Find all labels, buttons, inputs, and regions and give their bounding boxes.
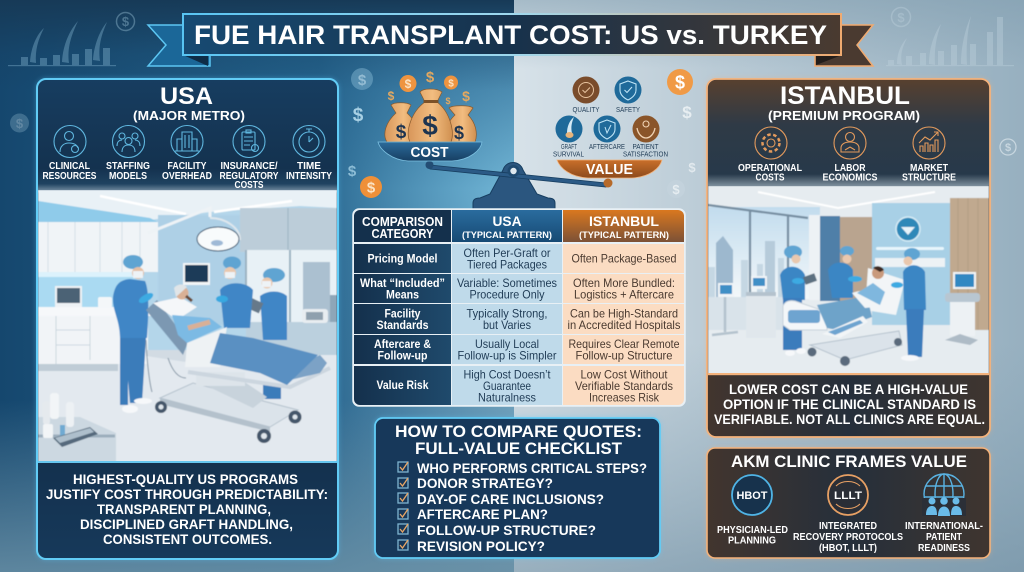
callout band: US programs: CONSISTENT OUTCOMES.: [103, 532, 272, 547]
subheading: major metro: (MAJOR METRO): [133, 108, 245, 123]
image: US clinic treatment room: [38, 190, 337, 462]
decoration: dollar coins left: $: [16, 116, 24, 131]
label: operational costs: COSTS: [756, 172, 785, 184]
labels: value factors: GRAFT: [561, 144, 577, 151]
label: market structure: [902, 163, 956, 184]
checklist items: [417, 460, 647, 554]
labels: value factors: SURVIVAL: [553, 152, 584, 158]
label: time intensity: INTENSITY: [286, 171, 332, 182]
label: clinical resources: CLINICAL: [49, 161, 90, 172]
label: staffing models: STAFFING: [106, 161, 150, 172]
icon: clinical resources: [54, 126, 86, 158]
table header: (TYPICAL PATTERN): [462, 230, 552, 241]
title banner: [148, 14, 873, 66]
labels: value factors: QUALITY: [572, 107, 600, 114]
callout band: lower cost: [708, 373, 989, 436]
table row: value risk: Low Cost Without: [580, 368, 668, 382]
label: operational costs: [738, 163, 802, 184]
label: time intensity: [286, 161, 332, 182]
label: international-patient readiness: READINESS: [918, 543, 970, 554]
table header: (TYPICAL PATTERN): [579, 230, 669, 241]
table header: COMPARISON: [362, 214, 443, 229]
label: physician-led planning: PLANNING: [728, 536, 776, 546]
icon: staffing models: [112, 126, 144, 158]
icon: coins above bags: $: [367, 180, 376, 196]
tray with bottles: [38, 417, 116, 462]
table row: value risk: Naturalness: [478, 392, 536, 404]
table row: aftercare and follow-up: [354, 335, 684, 364]
icon: facility overhead: [171, 126, 203, 158]
icon: coins above bags: [360, 69, 693, 198]
icon: scale fulcrum and beam: [426, 161, 612, 210]
checklist items: DAY-OF CARE INCLUSIONS?: [417, 491, 604, 507]
right machine: [950, 302, 976, 331]
icon: coins above bags: $: [462, 88, 470, 104]
label: market structure: STRUCTURE: [902, 172, 956, 184]
table row: value risk: Verifiable Standards: [575, 380, 673, 393]
table row: facility standards: [354, 304, 684, 334]
icon: coins above bags: $: [426, 69, 435, 86]
callout band: lower cost: VERIFIABLE. NOT ALL CLINICS ARE EQUAL.: [714, 412, 985, 427]
label: labor economics: ECONOMICS: [822, 172, 878, 184]
value pan: VALUE: [586, 162, 633, 178]
label: insurance and regulatory costs: [220, 161, 279, 191]
icon: coins above bags: $: [388, 89, 395, 103]
table row: facility standards: in Accredited Hospitals: [568, 319, 681, 332]
decoration: floating dollar signs: $: [672, 182, 680, 197]
icon: money bags: $: [454, 123, 464, 143]
table header: CATEGORY: [372, 226, 434, 241]
person far right: [260, 292, 287, 340]
decoration: floating dollar signs: [348, 68, 1016, 198]
table row: pricing model: [354, 244, 684, 273]
label: integrated recovery protocols: (HBOT, LLLT): [819, 543, 877, 554]
label: market structure: MARKET: [910, 163, 948, 174]
cost pan: [378, 142, 482, 161]
decoration: floating dollar signs: $: [1005, 142, 1011, 154]
table row: aftercare and follow-up: Follow-up is Simpler: [458, 350, 557, 362]
heading: checklist: FULL-VALUE CHECKLIST: [415, 439, 623, 458]
table row: what included means: Procedure Only: [470, 288, 545, 302]
icon: patient satisfaction: [632, 116, 660, 142]
table row: value risk: [354, 366, 684, 405]
callout band: US programs: HIGHEST-QUALITY US PROGRAMS: [73, 472, 298, 487]
table row: aftercare and follow-up: Requires Clear Remote: [568, 338, 680, 351]
panel: full-value checklist: [375, 418, 660, 558]
icon: HBOT: [732, 475, 772, 515]
table header: ISTANBUL: [589, 213, 659, 229]
labels: value factors: PATIENT: [632, 144, 659, 151]
table header: USA: [492, 213, 522, 229]
label: integrated recovery protocols: INTEGRATED: [819, 521, 877, 532]
table row: aftercare and follow-up: Aftercare &: [374, 338, 432, 351]
panel: USA: [37, 79, 338, 559]
checklist items: FOLLOW-UP STRUCTURE?: [417, 522, 596, 538]
labels: value factors: SAFETY: [616, 107, 640, 114]
icon: LLLT: [828, 475, 868, 515]
decoration: floating dollar signs: $: [688, 160, 696, 175]
label: facility overhead: FACILITY: [168, 161, 207, 172]
table row: facility standards: Standards: [376, 319, 428, 332]
icon: labor economics: [834, 127, 866, 159]
label: physician-led planning: [717, 525, 788, 546]
cost pan: COST: [410, 145, 449, 161]
icon: market structure chart: [913, 127, 945, 159]
label: facility overhead: [162, 161, 212, 182]
label: staffing models: [106, 161, 150, 182]
label: integrated recovery protocols: [793, 521, 903, 554]
value pan: [557, 160, 662, 178]
decoration: hair and bars top left: [8, 21, 116, 66]
icon: money bags: $: [422, 110, 438, 141]
callout band: US programs: JUSTIFY COST THROUGH PREDICTABILITY:: [46, 487, 328, 502]
icon: coins above bags: $: [675, 72, 685, 92]
table row: facility standards: Facility: [384, 308, 421, 320]
callout band: US programs: [38, 461, 337, 558]
labels: value factors: AFTERCARE: [589, 144, 625, 151]
decoration: hair and bars top right: [886, 8, 1014, 66]
callout band: US programs: DISCIPLINED GRAFT HANDLING,: [80, 517, 293, 532]
table row: what included means: Often More Bundled:: [573, 277, 675, 290]
image: Istanbul hospital room: [708, 186, 989, 376]
callout band: lower cost: OPTION IF THE CLINICAL STANDARD IS: [723, 397, 976, 412]
table row: pricing model: Tiered Packages: [467, 258, 547, 272]
table row: pricing model: Pricing Model: [368, 252, 438, 266]
decoration: dollar coins left: [10, 12, 134, 132]
callout band: lower cost: LOWER COST CAN BE A HIGH-VALUE: [729, 382, 968, 397]
labels: value factors: SATISFACTION: [623, 152, 668, 158]
icon: money bags: [385, 89, 476, 143]
table row: facility standards: Typically Strong,: [466, 308, 548, 320]
person left: [113, 279, 148, 338]
label: operational costs: OPERATIONAL: [738, 163, 802, 174]
table row: value risk: High Cost Doesn’t: [464, 368, 551, 382]
heading: USA: USA: [160, 83, 213, 110]
table row: what included means: Means: [386, 288, 419, 302]
icon: quality: [572, 76, 600, 104]
label: clinical resources: [42, 161, 97, 182]
person A: [780, 267, 805, 300]
labels: value factors: [553, 107, 668, 158]
table row: aftercare and follow-up: Follow-up: [378, 350, 428, 362]
table row: what included means: Variable: Sometimes: [457, 277, 557, 290]
decoration: floating dollar signs: $: [348, 163, 357, 180]
decoration: hair and bars top right: $: [897, 10, 905, 25]
label: physician-led planning: PHYSICIAN-LED: [717, 525, 788, 536]
label: international-patient readiness: INTERNATIONAL-: [905, 521, 983, 532]
table row: value risk: Value Risk: [376, 379, 429, 392]
checkboxes: [398, 462, 408, 550]
person centre: [220, 283, 253, 328]
heading: Istanbul: ISTANBUL: [780, 82, 910, 110]
table row: aftercare and follow-up: Follow-up Structure: [576, 350, 672, 362]
subheading: premium program: (PREMIUM PROGRAM): [768, 108, 920, 123]
label: integrated recovery protocols: RECOVERY PROTOCOLS: [793, 532, 903, 543]
table row: facility standards: but Varies: [483, 319, 531, 332]
icon: aftercare shield: [594, 116, 620, 142]
treatment bed: [160, 383, 298, 427]
panel: AKM Clinic frames value: [707, 448, 990, 558]
icon: operational costs gear: [755, 127, 787, 159]
table row: pricing model: Often Per-Graft or: [464, 247, 551, 260]
label: labor economics: LABOR: [834, 163, 866, 174]
callout band: US programs: TRANSPARENT PLANNING,: [97, 502, 271, 517]
label: insurance and regulatory costs: INSURANCE/: [220, 161, 278, 172]
heading: checklist: HOW TO COMPARE QUOTES:: [395, 422, 642, 441]
icon: HBOT: HBOT: [736, 490, 768, 502]
label: insurance and regulatory costs: REGULATORY: [220, 171, 279, 182]
label: clinical resources: RESOURCES: [42, 171, 97, 182]
table row: pricing model: Often Package-Based: [572, 252, 676, 266]
checklist items: WHO PERFORMS CRITICAL STEPS?: [417, 460, 647, 476]
label: international-patient readiness: [905, 521, 983, 554]
title banner: FUE HAIR TRANSPLANT COST: US vs. TURKEY: [194, 20, 827, 50]
checklist items: DONOR STRATEGY?: [417, 475, 553, 491]
table row: facility standards: Can be High-Standard: [570, 308, 678, 320]
decoration: floating dollar signs: $: [682, 103, 692, 122]
icon: graft survival: [556, 116, 582, 142]
icon: LLLT: LLLT: [834, 490, 862, 502]
table row: what included means: [354, 274, 684, 303]
label: facility overhead: OVERHEAD: [162, 171, 212, 182]
table row: value risk: Increases Risk: [589, 392, 659, 404]
person C: [903, 265, 926, 310]
icon: coins above bags: $: [405, 77, 412, 91]
table row: what included means: What “Included”: [360, 277, 445, 290]
checklist items: AFTERCARE PLAN?: [417, 506, 548, 522]
icon: safety shield: [614, 76, 642, 104]
table row: value risk: Guarantee: [483, 380, 531, 393]
decoration: dollar coins left: $: [122, 14, 130, 29]
heading: checklist: [395, 422, 642, 458]
scale: cost versus value: [360, 69, 693, 210]
icon: insurance clipboard: [233, 126, 265, 158]
icon: time intensity stopwatch: [293, 126, 325, 158]
icon: money bags: $: [396, 122, 407, 143]
table row: aftercare and follow-up: Usually Local: [475, 338, 539, 351]
decoration: floating dollar signs: $: [358, 72, 367, 89]
checklist items: REVISION POLICY?: [417, 538, 545, 554]
decoration: floating dollar signs: $: [353, 105, 364, 126]
heading: AKM: AKM CLINIC FRAMES VALUE: [731, 453, 967, 471]
label: labor economics: [822, 163, 878, 184]
table header: [354, 210, 684, 242]
table row: what included means: Logistics + Aftercare: [574, 288, 674, 302]
icon: coins above bags: $: [448, 78, 454, 90]
bed: [810, 331, 902, 360]
label: time intensity: TIME: [297, 161, 321, 172]
panel: Istanbul: [707, 79, 990, 437]
label: staffing models: MODELS: [109, 171, 147, 182]
label: international-patient readiness: PATIENT: [926, 532, 962, 543]
table: comparison: [353, 209, 685, 406]
person B: [828, 262, 853, 298]
icon: globe and people: [922, 474, 966, 516]
label: insurance and regulatory costs: COSTS: [234, 180, 264, 191]
icon: coins above bags: $: [445, 96, 451, 106]
